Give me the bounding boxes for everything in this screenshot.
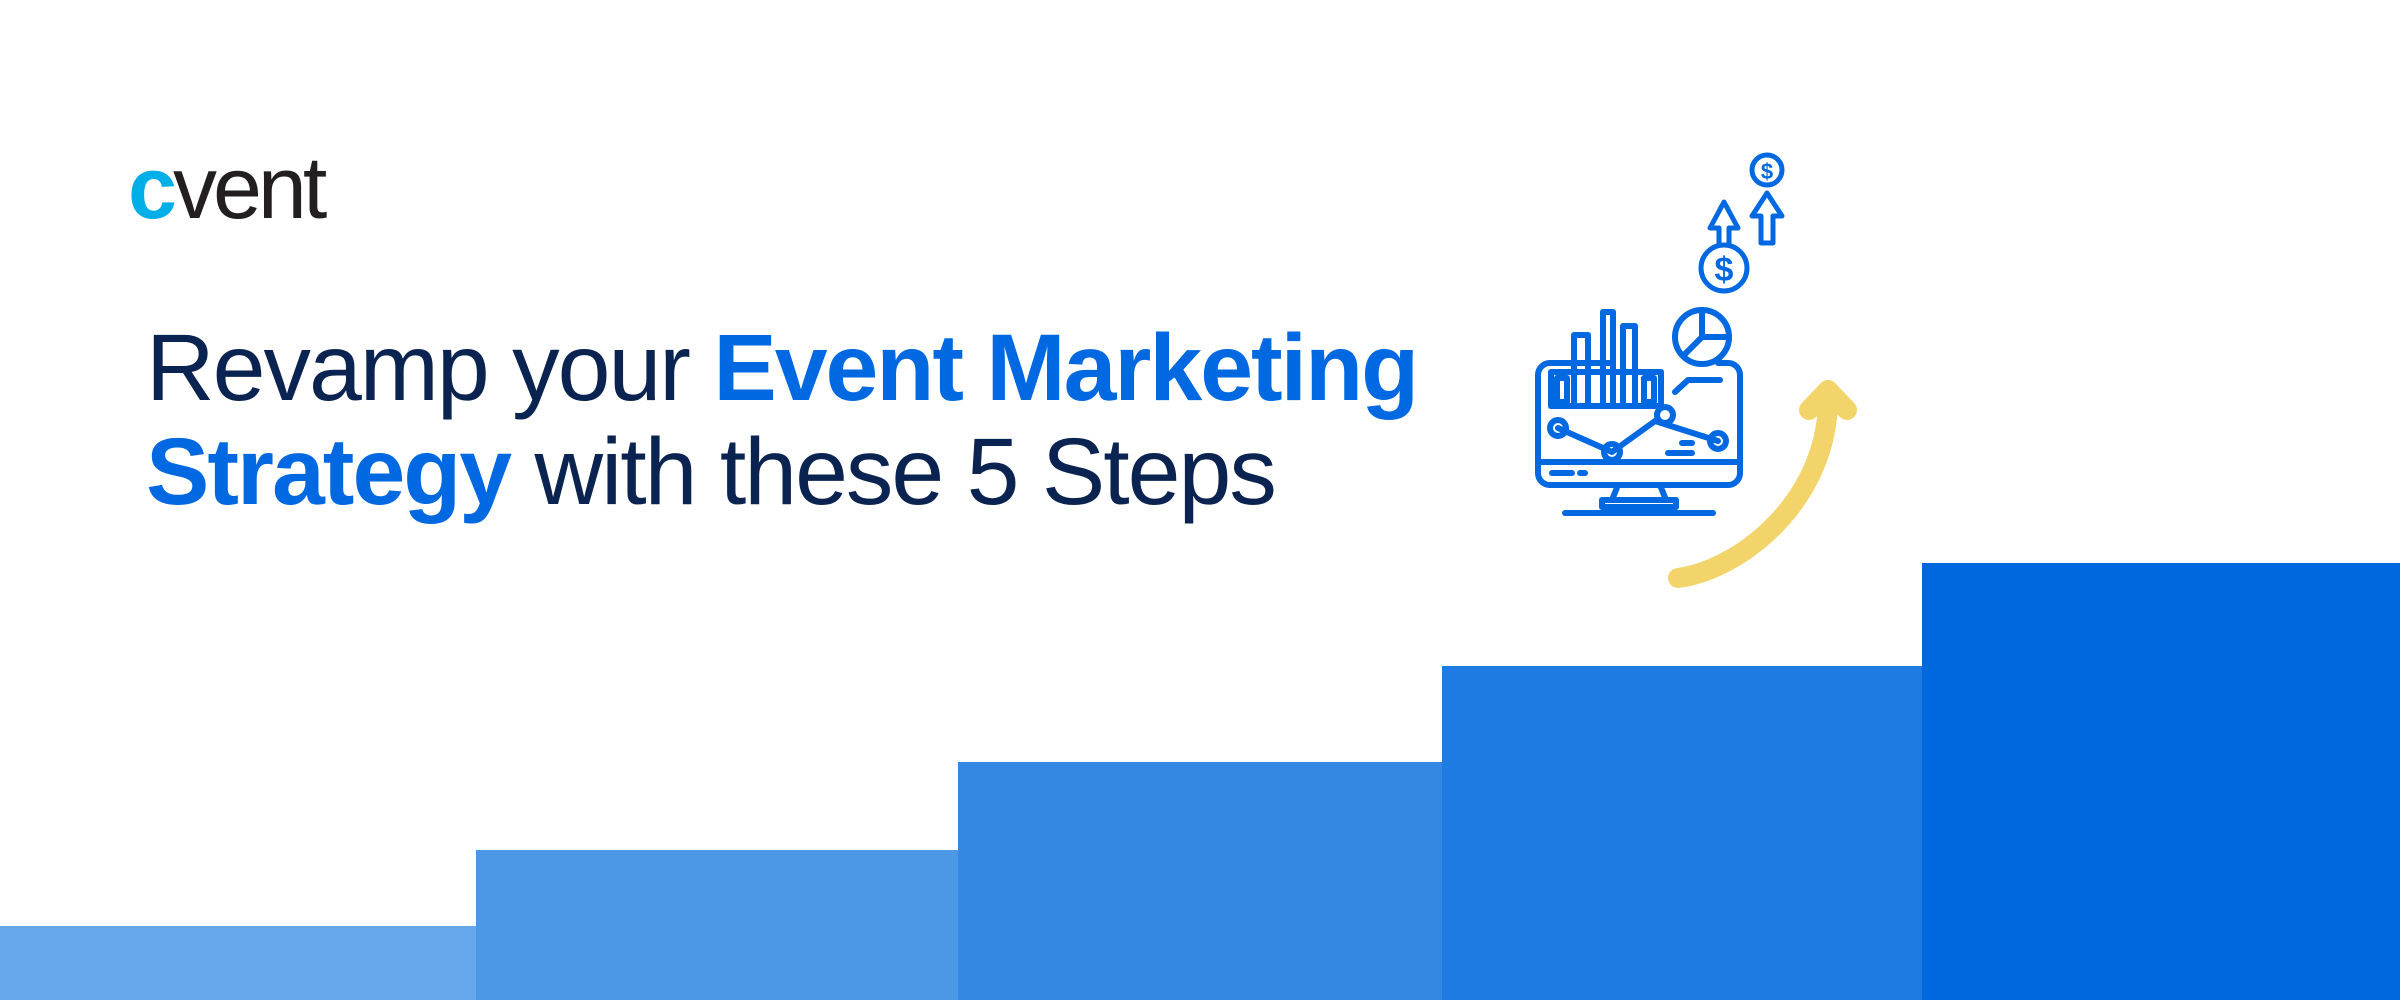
title: Strategy with these 5 Steps bbox=[146, 419, 1275, 525]
arrow: yellow growth arrow bbox=[1678, 390, 1847, 578]
icon: coins and up arrows: $ bbox=[1715, 251, 1734, 289]
step 5 bbox=[1922, 563, 2400, 1000]
icon: coins and up arrows bbox=[1701, 155, 1782, 291]
step 2 bbox=[476, 850, 958, 1000]
logo: cvent bbox=[128, 138, 323, 237]
step 1 bbox=[0, 926, 476, 1000]
step 3 bbox=[958, 762, 1442, 1000]
icon: coins and up arrows: $ bbox=[1761, 159, 1773, 184]
title bbox=[146, 315, 1417, 525]
step 4 bbox=[1442, 666, 1922, 1000]
icon: monitor bbox=[1538, 310, 1740, 513]
title: Revamp your Event Marketing bbox=[146, 315, 1417, 421]
steps staircase bbox=[0, 563, 2400, 1000]
